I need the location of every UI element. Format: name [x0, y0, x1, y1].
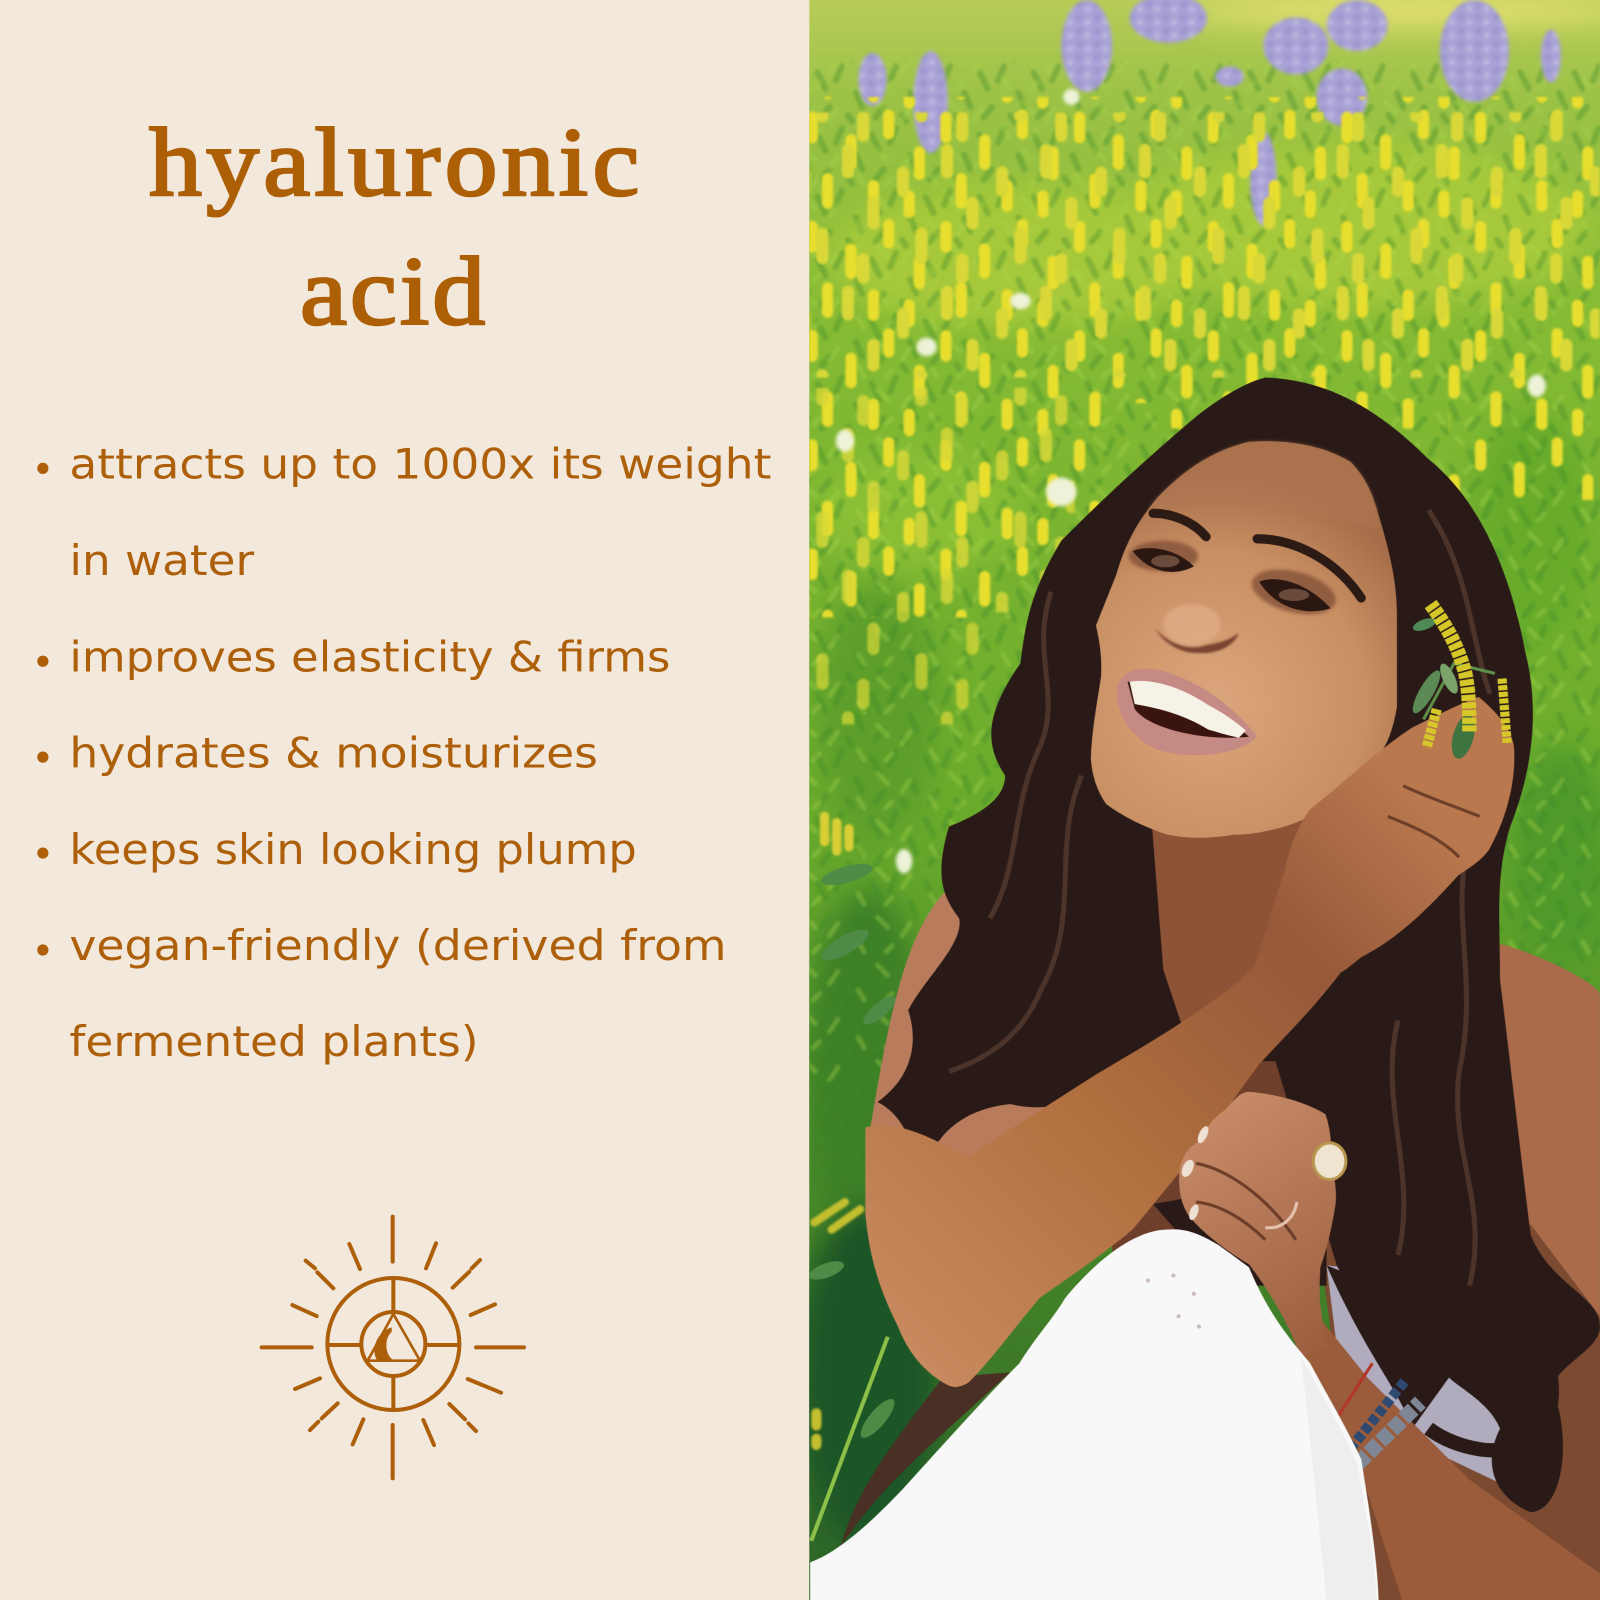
foliage shading	[796, 0, 1600, 1551]
background panel	[0, 0, 809, 1600]
hair highlights	[949, 510, 1490, 1286]
eyebrows	[1153, 513, 1361, 598]
benefits list: in water	[69, 536, 255, 585]
white blossoms	[836, 89, 1546, 873]
face	[1091, 441, 1397, 838]
lace top	[1326, 1265, 1500, 1482]
bracelets	[1338, 1363, 1420, 1464]
benefits list: vegan-friendly (derived from	[69, 921, 727, 970]
eyes	[1133, 548, 1331, 611]
benefits list: improves elasticity & firms	[69, 632, 670, 681]
mouth	[1117, 669, 1257, 755]
lupine flowers	[858, 0, 1561, 226]
title	[149, 108, 639, 346]
eye shadow	[1129, 541, 1340, 622]
nails	[1198, 1126, 1209, 1144]
leaf mottling	[809, 61, 1600, 1184]
neck	[1152, 820, 1304, 1023]
skin: shoulders and chest	[865, 893, 1600, 1600]
nose	[1155, 604, 1239, 653]
benefits list: fermented plants)	[69, 1017, 479, 1066]
benefits list: attracts up to 1000x its weight	[69, 440, 771, 489]
title: acid	[300, 238, 485, 346]
icon: sun logo	[262, 1217, 524, 1478]
photo: woman in flower field	[796, 0, 1600, 1600]
leaves	[807, 860, 900, 1541]
benefits list: keeps skin looking plump	[69, 825, 637, 874]
title: hyaluronic	[149, 108, 639, 217]
rings	[1313, 1143, 1346, 1180]
benefits list: hydrates & moisturizes	[69, 728, 598, 777]
benefits list	[37, 440, 771, 1066]
meadow background	[809, 0, 1600, 1600]
finger lines	[1388, 786, 1480, 857]
flower sprig	[1408, 604, 1507, 761]
yellow flower dabs	[809, 97, 1600, 1445]
white dress	[810, 1229, 1379, 1600]
hair	[841, 378, 1600, 1546]
lower hand and forearm	[1179, 1092, 1600, 1600]
raised arm and hand	[865, 697, 1514, 1387]
